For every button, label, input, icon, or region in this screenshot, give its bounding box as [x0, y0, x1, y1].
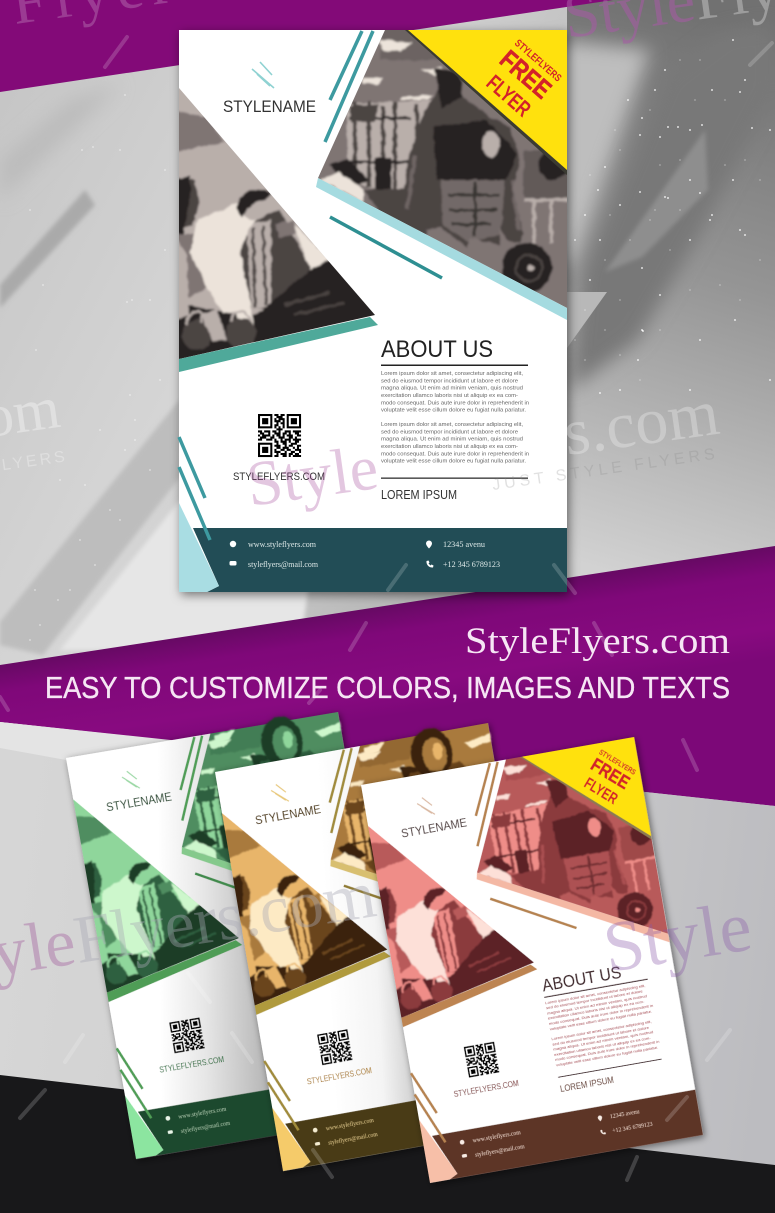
background: upper gray panel — [0, 0, 775, 700]
footer contact details: www.styleflyers.com — [248, 540, 317, 549]
logo name: STYLENAME — [400, 815, 468, 841]
footer contact details: +12 345 6789123 — [612, 1122, 653, 1135]
about us section: voluptate velit esse cillum dolore eu fugiat nulla pariatur. — [549, 1008, 652, 1031]
QR code and site label: STYLEFLYERS.COM — [159, 1055, 225, 1075]
footer contact details: 12345 avenu — [443, 540, 485, 549]
about us section: magna aliqua. Ut enim ad minim veniam, quis nostrud — [381, 386, 523, 392]
QR code and site label — [233, 415, 325, 483]
footer contact details: www.styleflyers.com — [472, 1129, 522, 1144]
heading: site name: StyleFlyers.com — [465, 621, 730, 662]
about us section: voluptate velit esse cillum dolore eu fugiat nulla pariatur. — [556, 1044, 658, 1067]
about us section: modo consequat. Duis aute irure dolor in reprehenderit in — [381, 400, 529, 406]
about us section: exercitation ullamco laboris nisi ut aliquip ex ea com- — [381, 393, 518, 399]
about us section: magna aliqua. Ut enim ad minim veniam, quis nostrud — [381, 437, 523, 443]
about us section — [381, 336, 529, 502]
yellow corner badge — [520, 737, 652, 860]
bottom black band — [0, 1075, 775, 1213]
about us section: Lorem ipsum dolor sit amet, consectetur adipiscing elit, — [381, 371, 523, 377]
about us section: exercitation ullamco laboris nisi ut aliquip ex ea com- — [381, 444, 518, 450]
photo: woman top — [152, 699, 387, 954]
about us section: voluptate velit esse cillum dolore eu fugiat nulla pariatur. — [381, 459, 526, 465]
about us section: Lorem ipsum dolor sit amet, consectetur adipiscing elit, — [551, 1019, 652, 1041]
flyer: red variant — [349, 724, 715, 1185]
about us section: LOREM IPSUM — [381, 488, 457, 502]
about us section: sed do eiusmod tempor incididunt ut labore et dolore — [381, 378, 518, 384]
about us section: voluptate velit esse cillum dolore eu fugiat nulla pariatur. — [381, 408, 526, 414]
accent strips and footer — [66, 713, 408, 1159]
QR code and site label — [446, 1040, 519, 1099]
about us section: modo consequat. Duis aute irure dolor in reprehenderit in — [548, 1003, 653, 1026]
about us section: magna aliqua. Ut enim ad minim veniam, quis nostrud — [553, 1029, 654, 1052]
footer contact details: www.styleflyers.com — [178, 1106, 227, 1121]
footer contact details: styleflyers@mail.com — [475, 1143, 526, 1159]
yellow corner badge: STYLEFLYERS — [597, 747, 638, 777]
footer contact details — [312, 1102, 459, 1149]
footer contact details: www.styleflyers.com — [325, 1117, 375, 1132]
footer contact details: +12 345 6789123 — [443, 560, 500, 569]
about us section: modo consequat. Duis aute irure dolor in reprehenderit in — [555, 1039, 660, 1062]
about us section: ABOUT US — [381, 336, 493, 363]
about us section: exercitation ullamco laboris nisi ut aliquip ex ea com- — [554, 1035, 652, 1057]
middle purple band — [0, 546, 775, 806]
photo: gym woman with dumbbell — [447, 724, 682, 978]
footer contact details: styleflyers@mail.com — [328, 1131, 379, 1147]
about us section: Lorem ipsum dolor sit amet, consectetur adipiscing elit, — [381, 422, 523, 428]
about us section: modo consequat. Duis aute irure dolor in reprehenderit in — [381, 451, 529, 457]
top purple band — [0, 0, 613, 92]
yellow corner badge: FLYER — [581, 775, 621, 808]
flyer: orange variant — [203, 710, 568, 1173]
about us section: LOREM IPSUM — [559, 1075, 615, 1094]
yellow corner badge: FREE — [587, 754, 634, 793]
yellow corner badge: STYLEFLYERS — [512, 37, 564, 84]
about us section — [541, 957, 665, 1094]
footer contact details — [459, 1106, 653, 1161]
background: lower gray panel — [0, 722, 775, 1165]
logo name: STYLENAME — [254, 802, 322, 828]
watermark: top left — [7, 0, 392, 38]
logo name: STYLENAME — [223, 97, 316, 116]
accent strips and footer — [215, 724, 556, 1171]
about us section: sed do eiusmod tempor incididunt ut labore et dolore — [552, 1025, 650, 1047]
photo: couple lifting kettlebells — [164, 75, 389, 375]
watermark: centre: JUST STYLE FLYERS — [491, 445, 720, 494]
footer contact details — [230, 540, 500, 569]
footer contact details: styleflyers@mail.com — [180, 1120, 231, 1135]
photo: couple lifting kettlebells — [356, 791, 551, 1031]
QR code and site label: STYLEFLYERS.COM — [453, 1079, 519, 1099]
about us section: sed do eiusmod tempor incididunt ut labore et dolore — [546, 988, 644, 1010]
logo name: STYLENAME — [105, 789, 173, 814]
yellow corner badge: FREE — [494, 44, 558, 105]
accent strips and footer — [361, 738, 703, 1183]
QR code and site label — [300, 1027, 373, 1087]
watermark: lower right: Style — [598, 886, 757, 988]
about us section: ABOUT US — [541, 962, 623, 995]
photo: couple — [61, 765, 256, 1006]
photo: gym woman with dumbbell — [304, 15, 584, 325]
flyer: green variant — [54, 699, 420, 1161]
accent strips, lines and footer bar — [179, 31, 567, 592]
QR code and site label: STYLEFLYERS.COM — [306, 1066, 373, 1087]
watermark: centre — [0, 374, 723, 520]
about us section: magna aliqua. Ut enim ad minim veniam, quis nostrud — [547, 993, 647, 1016]
about us section: Lorem ipsum dolor sit amet, consectetur adipiscing elit, — [545, 983, 646, 1005]
about us section: exercitation ullamco laboris nisi ut aliquip ex ea com- — [548, 999, 645, 1021]
about us section: sed do eiusmod tempor incididunt ut labore et dolore — [381, 429, 518, 435]
flyer: main teal mockup — [164, 15, 584, 592]
footer contact details: 12345 avenu — [610, 1109, 640, 1120]
yellow corner badge — [405, 30, 567, 175]
yellow corner badge: FLYER — [482, 70, 536, 122]
footer contact details: styleflyers@mail.com — [248, 560, 319, 569]
watermark: centre: Style — [242, 431, 382, 520]
photo: couple — [210, 777, 405, 1019]
watermark: centre: s.com — [559, 376, 723, 470]
QR code and site label: STYLEFLYERS.COM — [233, 471, 325, 483]
photo: woman top — [301, 710, 536, 966]
footer contact details — [165, 1092, 312, 1137]
QR code and site label — [152, 1015, 225, 1075]
